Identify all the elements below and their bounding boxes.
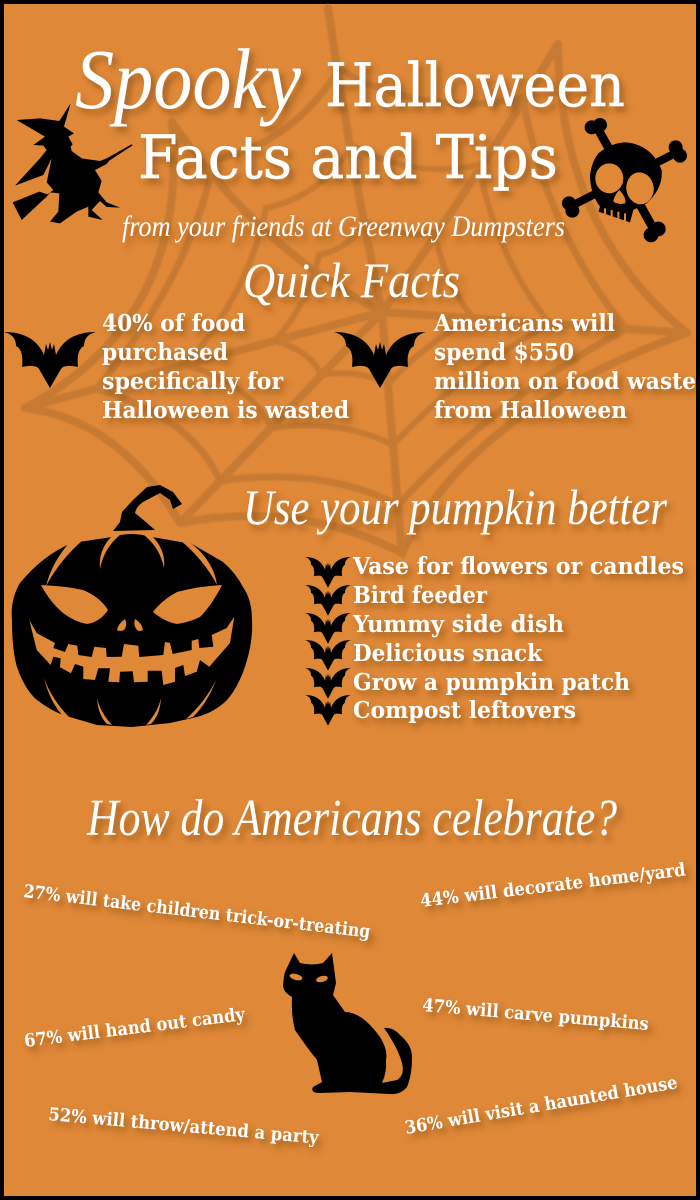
subtitle: from your friends at Greenway Dumpsters	[122, 210, 565, 243]
stat: candy: 67% will hand out candy	[23, 1004, 246, 1052]
title	[75, 31, 625, 193]
spider web	[25, 8, 687, 553]
list: pumpkin uses	[305, 553, 684, 726]
heading: quick facts: Quick Facts	[243, 252, 460, 308]
fact: food wasted	[102, 310, 349, 424]
stat: trick-or-treating: 27% will take children trick-or-treating	[22, 881, 372, 943]
list text: Vase for flowers or candles	[352, 553, 684, 580]
list text	[352, 553, 684, 724]
icon: bat left	[4, 332, 96, 388]
heading: how do americans celebrate: How do Americans celebrate?	[86, 790, 617, 847]
list text: Yummy side dish	[352, 611, 564, 638]
stat: party: 52% will throw/attend a party	[48, 1104, 320, 1149]
bat bullets	[305, 557, 351, 726]
fact: food wasted: specifically for	[102, 368, 284, 395]
title: Facts and Tips	[138, 123, 558, 193]
stat: pumpkins: 47% will carve pumpkins	[422, 995, 650, 1035]
icon: skull and crossbones	[562, 118, 687, 242]
fact: food wasted: 40% of food	[102, 310, 245, 337]
stats: celebration percentages	[22, 859, 687, 1149]
list text: Delicious snack	[353, 640, 543, 667]
fact: money spent: Americans will	[433, 310, 615, 337]
list text: Bird feeder	[353, 582, 488, 609]
icon: witch on broom	[13, 103, 133, 223]
fact: money spent: from Halloween	[434, 397, 627, 424]
fact: money spent: spend $550	[434, 339, 574, 366]
icon: bat right	[334, 332, 426, 388]
list text: Grow a pumpkin patch	[353, 669, 630, 696]
title: Halloween	[325, 51, 625, 121]
panel: quick facts	[4, 310, 696, 424]
icon: jack-o-lantern	[12, 485, 252, 727]
fact: money spent	[433, 310, 696, 424]
list text: Compost leftovers	[353, 697, 576, 724]
title: Spooky	[75, 31, 302, 127]
fact: food wasted: Halloween is wasted	[102, 397, 349, 424]
fact: food wasted: purchased	[102, 339, 228, 366]
icon: black cat	[283, 953, 412, 1094]
